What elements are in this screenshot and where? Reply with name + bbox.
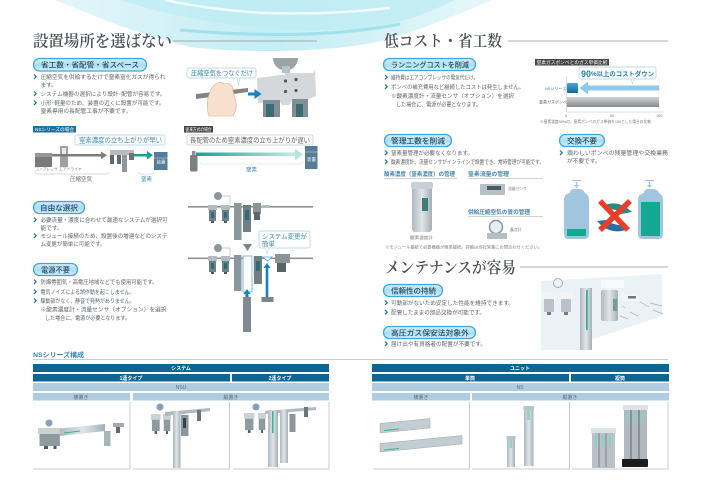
bar chart: ガスコスト比較: ※窒素濃度99%の、窒素ボンベのガス単価を100とした場合の比較	[540, 119, 651, 124]
table: システム: 縦置き	[223, 394, 239, 401]
panel: 省工数: 圧縮空気を供給するだけで窒素富化ガスが得られ	[40, 73, 166, 81]
table: システム: システム	[171, 366, 191, 372]
panel: 省工数: 小形･軽量のため、装置の近くに設置が可能です。	[40, 99, 164, 107]
diagram: NSシリーズの場合: コンプレッサ	[35, 166, 58, 172]
bar chart: ガスコスト比較: NSシリーズ	[545, 85, 566, 91]
panel: 管理工数を削減: ※モジュール接続で必要機器が簡単接続。詳細は当社営業にお問合わせください。	[385, 244, 542, 250]
panel: 電源不要: ※酸素濃度計・流量センサ（オプション）を選択	[40, 306, 167, 314]
table: ユニット: 横置き	[413, 394, 429, 401]
panel: 管理工数を削減: 窒素量管理が必要なくなります。	[391, 149, 473, 157]
diagram: NSシリーズの場合: 窒素濃度の立ち上がりが早い	[79, 136, 162, 144]
diagram: NSシリーズの場合: 圧縮空気	[70, 175, 93, 183]
diagram: NSシリーズの場合: 窒素	[141, 175, 153, 183]
diagram: NSシリーズの場合: エアドライヤ	[59, 166, 82, 172]
panel: 交換不要: 交換不要	[567, 136, 598, 146]
diagram: NSシリーズの場合: 装置	[156, 158, 166, 166]
heading: NSシリーズ構成: NSシリーズ構成	[33, 350, 85, 359]
panel: 管理工数を削減: 窒素流量の管理	[468, 170, 509, 178]
table: ユニット: 単筒	[465, 375, 475, 382]
panel: 省工数: ます。	[40, 82, 57, 89]
table: ユニット: 複筒	[615, 375, 625, 382]
bar chart: ガスコスト比較: %以上のコストダウン	[591, 69, 654, 78]
table: システム: 横置き	[73, 394, 89, 401]
panel: 管理工数を削減: 流量センサ	[508, 186, 527, 191]
panel: 省工数: システム機器の選択により設計･配管が容易です。	[40, 90, 166, 98]
panel: 管理工数を削減: 酸素濃度計、流量センサがインラインで設置でき、常時管理が可能です。	[391, 158, 544, 166]
panel: 交換不要: 煩わしいボンベの残量管理や交換業務	[567, 149, 668, 157]
illustration: 圧縮空気をつなぐだけ: 圧縮空気をつなぐだけ	[191, 68, 253, 78]
bar chart: ガスコスト比較: 0	[565, 114, 567, 118]
product: 複筒 unit	[591, 405, 648, 468]
panel: 管理工数を削減: 酸素濃度計	[410, 235, 433, 240]
panel: 管理工数を削減: 管理工数を削減	[391, 136, 446, 146]
diagram: 従来方式の場合: 窒素	[246, 166, 258, 174]
panel: 管理工数を削減	[384, 134, 544, 250]
diagram: system after change: 簡単	[262, 239, 276, 248]
product: 横置き unit	[380, 418, 462, 452]
diagram: 従来方式の場合	[184, 126, 318, 174]
panel: 電源不要: 駆動部がなく、静音で発熱がありません。	[40, 297, 134, 305]
diagram: system before change	[188, 192, 313, 240]
table: ユニット: 縦置き	[562, 394, 578, 401]
diagram: 従来方式の場合: 従来方式の場合	[186, 126, 212, 133]
panel: 省工数	[34, 58, 166, 115]
panel: 自由な選択	[34, 202, 168, 248]
background wave	[55, 0, 492, 51]
panel: 高圧ガス保安法対象外: 届け出や有資格者の配置が不要です。	[391, 340, 486, 348]
panel: 電源不要: 防爆雰囲気・高電圧地域などでも使用可能です。	[40, 278, 158, 286]
diagram: NSシリーズの場合: NSシリーズの場合	[35, 126, 74, 133]
panel: 電源不要: した場合に、電源が必要となります。	[45, 314, 130, 322]
icon: down triangle	[243, 244, 252, 251]
panel: 管理工数を削減: 供給圧縮空気の質の管理	[468, 208, 530, 216]
panel: 高圧ガス保安法対象外	[384, 326, 486, 348]
bar chart: ガスコスト比較: 窒素ガスボンベ	[539, 98, 567, 104]
bar chart: ガスコスト比較: 窒素ガスボンベとのガス単価比較	[536, 59, 608, 66]
icon: cylinders and cross	[564, 180, 663, 239]
panel: ランニングコストを削減: ボンベの補充費用など継続したコストは発生しません。	[391, 83, 524, 91]
table: システム: NSU	[176, 385, 187, 391]
table: システム: 2連タイプ	[269, 375, 291, 382]
panel: 信頼性の持続: 信頼性の持続	[391, 286, 437, 296]
panel: 自由な選択: 能です。	[40, 224, 63, 232]
product: 縦置き unit	[506, 406, 534, 467]
bar chart: ガスコスト比較: 100	[656, 114, 662, 118]
panel: 自由な選択: 必要流量・濃度に合わせて最適なシステムが選択可	[40, 216, 168, 224]
diagram: 従来方式の場合: 長配管のため窒素濃度の立ち上がりが遅い	[190, 136, 310, 144]
product: 縦置き 2連	[244, 404, 316, 467]
table: ユニット: ユニット	[510, 366, 530, 372]
panel: 自由な選択: 自由な選択	[40, 204, 79, 212]
panel: 電源不要: 電気ノイズによる誤作動を起こしません。	[40, 288, 134, 296]
bar chart: ガスコスト比較: 50	[610, 114, 614, 118]
panel: 電源不要	[34, 264, 167, 322]
panel: ランニングコストを削減: ※酸素濃度計・流量センサ（オプション）を選択	[391, 92, 514, 100]
table: システム: 1連タイプ	[120, 375, 142, 382]
diagram: NSシリーズの場合	[33, 126, 168, 183]
table: ユニット: NS	[517, 385, 524, 391]
bar chart: ガスコスト比較	[535, 59, 664, 124]
panel: 管理工数を削減: 酸素濃度（窒素濃度）の管理	[384, 170, 455, 178]
panel: ランニングコストを削減: 維持費はエアコンプレッサの電気代だけ。	[391, 74, 478, 82]
product: 横置き 1連	[38, 420, 124, 449]
illustration: wall mounted unit	[541, 274, 663, 350]
panel: 高圧ガス保安法対象外: 高圧ガス保安法対象外	[391, 328, 470, 338]
illustration: 圧縮空気をつなぐだけ	[187, 58, 316, 117]
panel: 信頼性の持続	[384, 284, 514, 316]
panel: 交換不要: が不要です。	[567, 157, 601, 165]
table: ユニット	[372, 364, 669, 469]
panel: 管理工数を削減: 露点計	[510, 227, 522, 232]
panel: 信頼性の持続: 配管したままの部品交換が可能です。	[391, 308, 485, 316]
heading: 設置場所を選ばない: 設置場所を選ばない	[33, 32, 172, 50]
table: システム	[33, 364, 329, 469]
panel: 自由な選択: ム変更が簡単に可能です。	[40, 240, 106, 248]
diagram: 従来方式の場合: 装置	[307, 156, 316, 163]
panel: 省工数: 窒素専用の長配管工事が不要です。	[40, 107, 132, 115]
diagram: system after change	[188, 231, 313, 332]
panel: 信頼性の持続: 可動部がないため安定した性能を維持できます。	[391, 299, 514, 307]
diagram: system after change: システム変更が	[262, 232, 307, 240]
panel: ランニングコストを削減	[384, 58, 524, 108]
panel: 交換不要	[560, 134, 668, 165]
panel: 自由な選択: モジュール接続のため、設置後の増連などのシステ	[40, 232, 168, 240]
product: 縦置き 1連	[151, 404, 210, 468]
bar chart: ガスコスト比較: 90	[581, 69, 591, 79]
panel: 電源不要: 電源不要	[41, 266, 71, 274]
heading: 低コスト・省工数: 低コスト・省工数	[384, 32, 502, 50]
panel: ランニングコストを削減: した場合に、電源が必要となります。	[396, 100, 481, 108]
panel: 省工数: 省工数・省配管・省スペース	[41, 60, 139, 70]
panel: ランニングコストを削減: ランニングコストを削減	[391, 60, 470, 70]
heading: メンテナンスが容易: メンテナンスが容易	[385, 258, 516, 277]
